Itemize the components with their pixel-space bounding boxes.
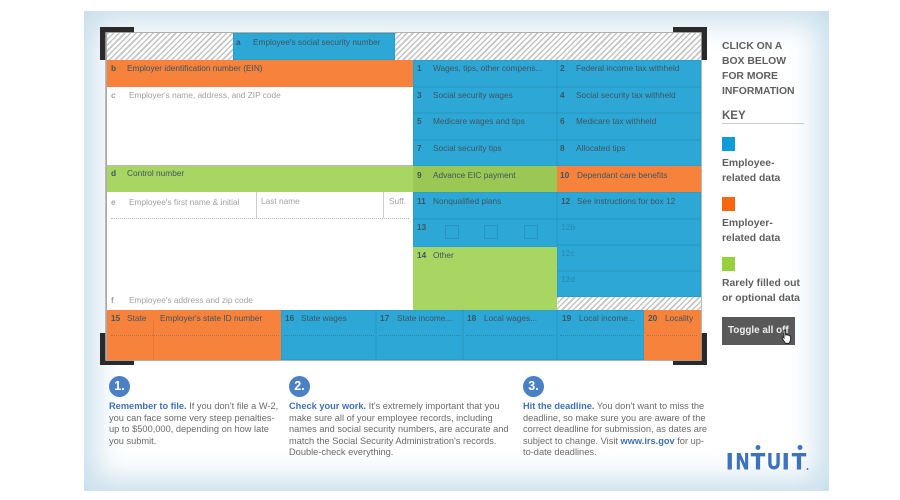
box 9 bbox=[413, 166, 557, 192]
background card bbox=[84, 11, 829, 491]
step 2 text bbox=[289, 401, 509, 457]
box 7: Social security tips bbox=[433, 143, 502, 153]
box 3 bbox=[413, 87, 557, 113]
step 2 text: match the Social Security Administration's records. bbox=[289, 436, 496, 446]
box d: d bbox=[111, 168, 116, 178]
box 1: 1 bbox=[417, 63, 422, 73]
step 3 text: to-date deadlines. bbox=[523, 447, 597, 457]
box 15 bbox=[107, 310, 281, 360]
box 18: Local wages... bbox=[484, 313, 537, 323]
box 12d: 12d bbox=[561, 274, 575, 284]
box 7 bbox=[413, 140, 557, 166]
box 13: 13 bbox=[417, 222, 426, 232]
box e and f: f bbox=[111, 295, 114, 305]
step 3 text: correct deadline for submission, as dates are bbox=[523, 424, 707, 434]
step 2 text: Double-check everything. bbox=[289, 447, 393, 457]
box 8: Allocated tips bbox=[576, 143, 625, 153]
Intuit logo: T bbox=[792, 449, 807, 474]
box 15: Employer's state ID number bbox=[160, 313, 262, 323]
box 17: 17 bbox=[380, 313, 389, 323]
key heading bbox=[722, 108, 804, 124]
box 5 bbox=[413, 113, 557, 140]
box d bbox=[107, 166, 413, 192]
key label: employer: Employer- bbox=[722, 218, 773, 228]
box 12c: 12c bbox=[561, 248, 575, 258]
step 1 text: you submit. bbox=[109, 436, 156, 446]
box 12c bbox=[557, 245, 701, 271]
step 3 text: subject to change. Visit www.irs.gov for up- bbox=[523, 436, 704, 446]
box 16: 16 bbox=[285, 313, 294, 323]
box a bbox=[233, 33, 395, 60]
key label: employer bbox=[722, 218, 780, 244]
box 12d bbox=[557, 271, 701, 297]
box 7: 7 bbox=[417, 143, 422, 153]
box 3: 3 bbox=[417, 90, 422, 100]
box 18 bbox=[463, 310, 557, 360]
box 6: 6 bbox=[560, 116, 565, 126]
box a: a bbox=[236, 37, 241, 47]
hatched band beside box 14 bbox=[557, 297, 701, 310]
step 1 text bbox=[109, 401, 278, 446]
box 5: Medicare wages and tips bbox=[433, 116, 525, 126]
box 4: Social security tax withheld bbox=[576, 90, 676, 100]
box 18: 18 bbox=[467, 313, 476, 323]
box 6 bbox=[557, 113, 701, 140]
box 11: 11 bbox=[417, 196, 426, 206]
step 3 text: Hit the deadline. You don't want to miss the bbox=[523, 401, 704, 411]
box 17: State income... bbox=[397, 313, 452, 323]
step 2 text: make sure all of your employee records, including bbox=[289, 413, 493, 423]
box 14 bbox=[413, 247, 557, 310]
box 11 bbox=[413, 192, 557, 219]
box 8: 8 bbox=[560, 143, 565, 153]
box 15: State bbox=[127, 313, 146, 323]
key label: optional bbox=[722, 278, 800, 304]
key swatch: optional bbox=[722, 257, 735, 270]
box 20 bbox=[644, 310, 701, 360]
unused hatched band, top left bbox=[107, 33, 233, 60]
key label: employee: Employee- bbox=[722, 158, 775, 168]
key swatch: employee bbox=[722, 137, 735, 150]
step 2 text: Check your work. It's extremely important that you bbox=[289, 401, 500, 411]
box 19 bbox=[557, 310, 644, 360]
box 11: Nonqualified plans bbox=[433, 196, 501, 206]
box 9: Advance EIC payment bbox=[433, 170, 516, 180]
step 1 text: up to $500,000, depending on how late bbox=[109, 424, 269, 434]
box 5: 5 bbox=[417, 116, 422, 126]
step 3 text: deadline, so make sure you are aware of the bbox=[523, 413, 706, 423]
box 12b bbox=[557, 219, 701, 245]
box b: b bbox=[111, 63, 116, 73]
key swatch: employer bbox=[722, 197, 735, 210]
box 19: 19 bbox=[562, 313, 571, 323]
toggle button bbox=[722, 317, 795, 345]
box 2: 2 bbox=[560, 63, 565, 73]
icon: hand cursor bbox=[782, 330, 792, 344]
box 2: Federal income tax withheld bbox=[576, 63, 679, 73]
step 1 badge: 1. bbox=[114, 379, 125, 393]
Intuit logo: N bbox=[736, 449, 749, 474]
box a: Employee's social security number bbox=[253, 37, 380, 47]
key label: optional: or optional data bbox=[722, 292, 800, 304]
key label: employer: related data bbox=[722, 232, 780, 244]
step 1 text: you can face some very steep penalties- bbox=[109, 413, 275, 423]
box 4 bbox=[557, 87, 701, 113]
box 10 bbox=[557, 166, 701, 192]
step 3 text bbox=[523, 401, 707, 457]
box 16 bbox=[281, 310, 376, 360]
step 2 text: names and social security numbers, are accurate and bbox=[289, 424, 509, 434]
box e and f: Last name bbox=[261, 196, 300, 206]
key label: optional: Rarely filled out bbox=[722, 278, 800, 288]
box c: Employer's name, address, and ZIP code bbox=[129, 90, 281, 100]
box 9: 9 bbox=[417, 170, 422, 180]
box 13 bbox=[413, 219, 557, 247]
box e and f: Employee's address and zip code bbox=[129, 295, 253, 305]
Intuit logo bbox=[726, 445, 808, 474]
box 15: 15 bbox=[111, 313, 120, 323]
box 14: 14 bbox=[417, 250, 426, 260]
box e and f: Employee's first name & initial bbox=[129, 197, 239, 207]
box 19: Local income... bbox=[579, 313, 635, 323]
instruction heading: BOX BELOW bbox=[722, 56, 786, 66]
box 6: Medicare tax withheld bbox=[576, 116, 656, 126]
box b: Employer identification number (EIN) bbox=[127, 63, 263, 73]
instruction heading bbox=[722, 40, 795, 96]
box 1: Wages, tips, other compens... bbox=[433, 63, 542, 73]
W-2 form bbox=[107, 33, 701, 360]
box e and f: e bbox=[111, 197, 116, 207]
box 14: Other bbox=[433, 250, 454, 260]
step 1 badge bbox=[109, 376, 130, 397]
key label: employee: related data bbox=[722, 172, 780, 184]
box d: Control number bbox=[127, 168, 184, 178]
box 8 bbox=[557, 140, 701, 166]
box 12: See instructions for box 12 bbox=[577, 196, 675, 206]
key label: employee bbox=[722, 158, 780, 184]
box c: c bbox=[111, 90, 116, 100]
box 16: State wages bbox=[301, 313, 347, 323]
box e and f bbox=[111, 192, 409, 305]
box 1 bbox=[413, 60, 557, 87]
instruction heading: CLICK ON A bbox=[722, 40, 782, 52]
box 12 bbox=[557, 192, 701, 219]
unused hatched band, top right bbox=[395, 33, 701, 60]
box 12: 12 bbox=[561, 196, 570, 206]
Intuit logo: T bbox=[751, 449, 766, 474]
step 3 badge bbox=[523, 376, 544, 397]
step 3 badge: 3. bbox=[528, 379, 539, 393]
box 2 bbox=[557, 60, 701, 87]
box 12b: 12b bbox=[561, 222, 575, 232]
instruction heading: FOR MORE bbox=[722, 70, 778, 82]
toggle button: Toggle all off bbox=[728, 325, 789, 336]
box e and f: Suff. bbox=[389, 196, 406, 206]
box b bbox=[107, 60, 413, 87]
step 1 text: Remember to file. If you don't file a W-2, bbox=[109, 401, 278, 411]
box 20: Locality bbox=[665, 313, 693, 323]
box 4: 4 bbox=[560, 90, 565, 100]
box 17 bbox=[376, 310, 463, 360]
key heading: KEY bbox=[722, 110, 746, 122]
step 2 badge: 2. bbox=[294, 379, 305, 393]
box 10: 10 bbox=[560, 170, 569, 180]
box 20: 20 bbox=[648, 313, 657, 323]
box 3: Social security wages bbox=[433, 90, 513, 100]
step 2 badge bbox=[289, 376, 310, 397]
instruction heading: INFORMATION bbox=[722, 86, 795, 96]
box 10: Dependant care benefits bbox=[577, 170, 667, 180]
Intuit logo: I bbox=[782, 449, 789, 474]
Intuit logo: U bbox=[768, 449, 780, 474]
Intuit logo: I bbox=[726, 449, 733, 474]
